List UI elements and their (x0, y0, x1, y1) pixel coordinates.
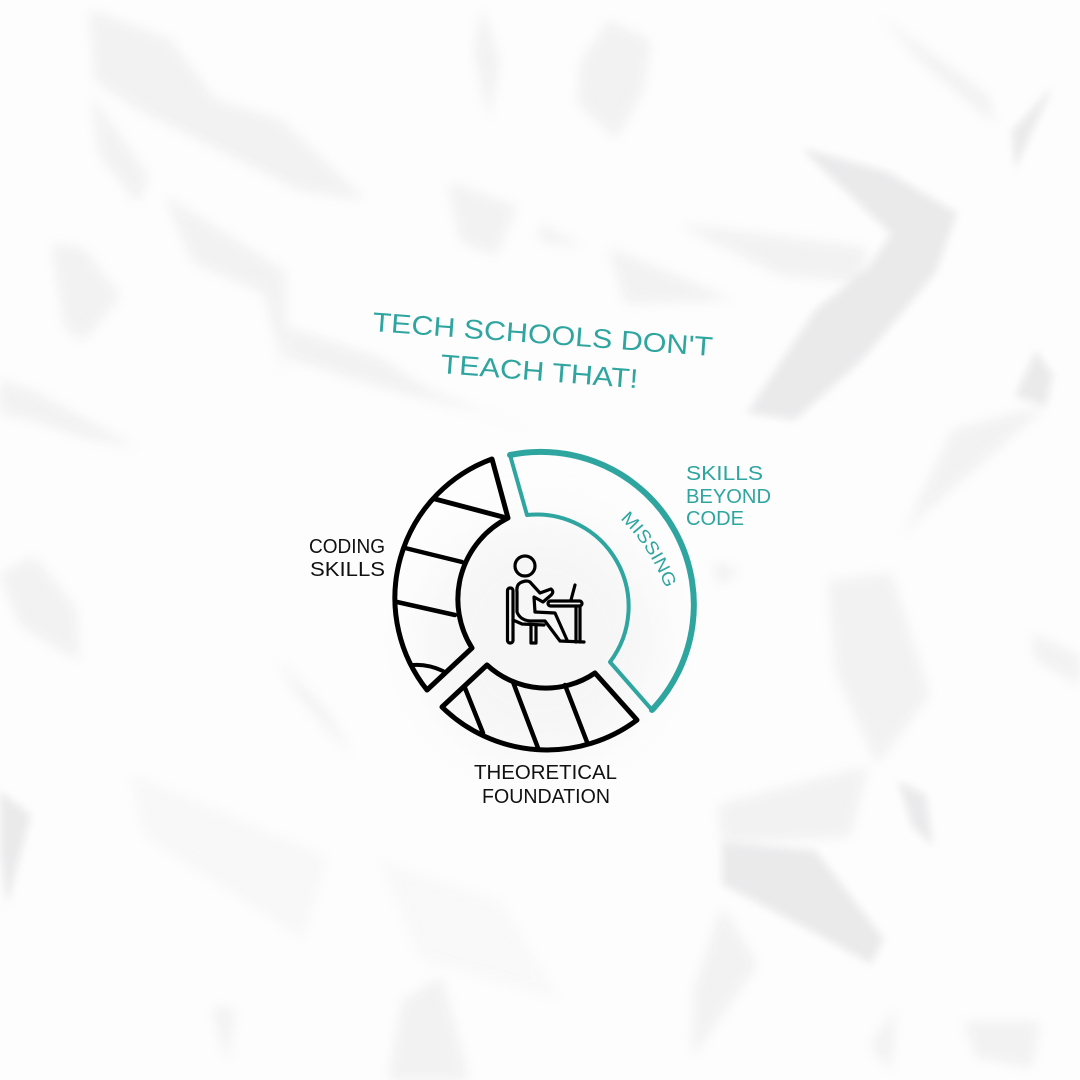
label: skills beyond code: BEYOND (686, 485, 771, 508)
label: theoretical foundation: FOUNDATION (482, 785, 610, 808)
segment: coding skills (395, 459, 508, 690)
label: skills beyond code: SKILLS (686, 462, 763, 485)
title: TEACH THAT! (440, 349, 639, 394)
segment: skills beyond code (missing) (507, 448, 697, 713)
label: coding skills: CODING (309, 535, 385, 558)
label: coding skills (309, 535, 385, 581)
label: coding skills: SKILLS (310, 558, 385, 581)
title (372, 307, 714, 394)
donut chart (392, 448, 697, 752)
label: theoretical foundation: THEORETICAL (474, 761, 617, 784)
title: TECH SCHOOLS DON'T (372, 307, 714, 362)
label: skills beyond code (686, 462, 771, 530)
label: skills beyond code: CODE (686, 507, 744, 530)
label: theoretical foundation (474, 761, 617, 808)
label: missing: MISSING (621, 511, 676, 586)
icon: person at laptop (508, 556, 584, 643)
segment: theoretical foundation (442, 665, 637, 750)
